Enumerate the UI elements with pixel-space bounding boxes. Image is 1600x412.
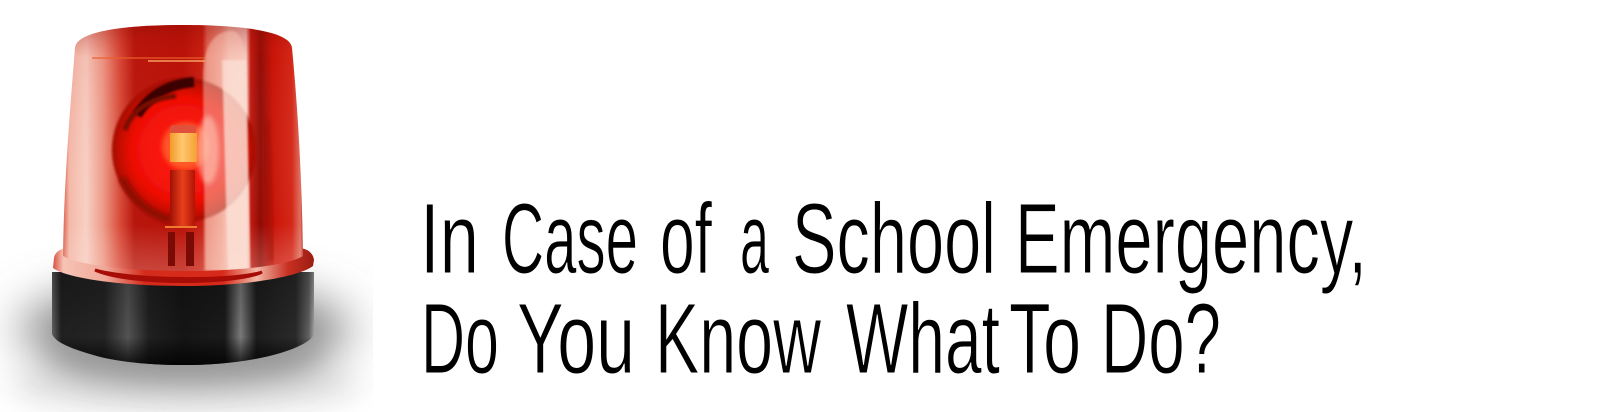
title line 2 <box>421 283 1221 395</box>
red rim <box>53 248 314 286</box>
top inner bands <box>92 57 205 62</box>
title line 2: What <box>846 283 1000 395</box>
glass dome <box>60 20 310 282</box>
icon: red emergency beacon light <box>10 20 360 411</box>
title line 1: In <box>420 183 479 295</box>
lamp bulb <box>170 125 197 162</box>
dark right streak <box>266 120 272 262</box>
title line 2: Do? <box>1101 283 1221 395</box>
floor shadow <box>10 288 360 411</box>
title line 1: of <box>660 183 712 295</box>
title line 1: a <box>740 183 769 295</box>
title line 2: Do <box>421 283 499 395</box>
title line 1: Case <box>502 183 638 295</box>
black base <box>52 272 314 365</box>
title line 2: To <box>1009 283 1081 395</box>
circular reflector <box>112 78 256 222</box>
title line 2: You <box>517 283 635 395</box>
title line 1 <box>420 183 1367 295</box>
lamp stem <box>165 170 197 266</box>
title <box>420 183 1367 395</box>
title line 1: Emergency, <box>1015 183 1367 295</box>
dome highlight <box>197 31 250 270</box>
title line 2: Know <box>655 283 822 395</box>
title line 1: School <box>792 183 996 295</box>
